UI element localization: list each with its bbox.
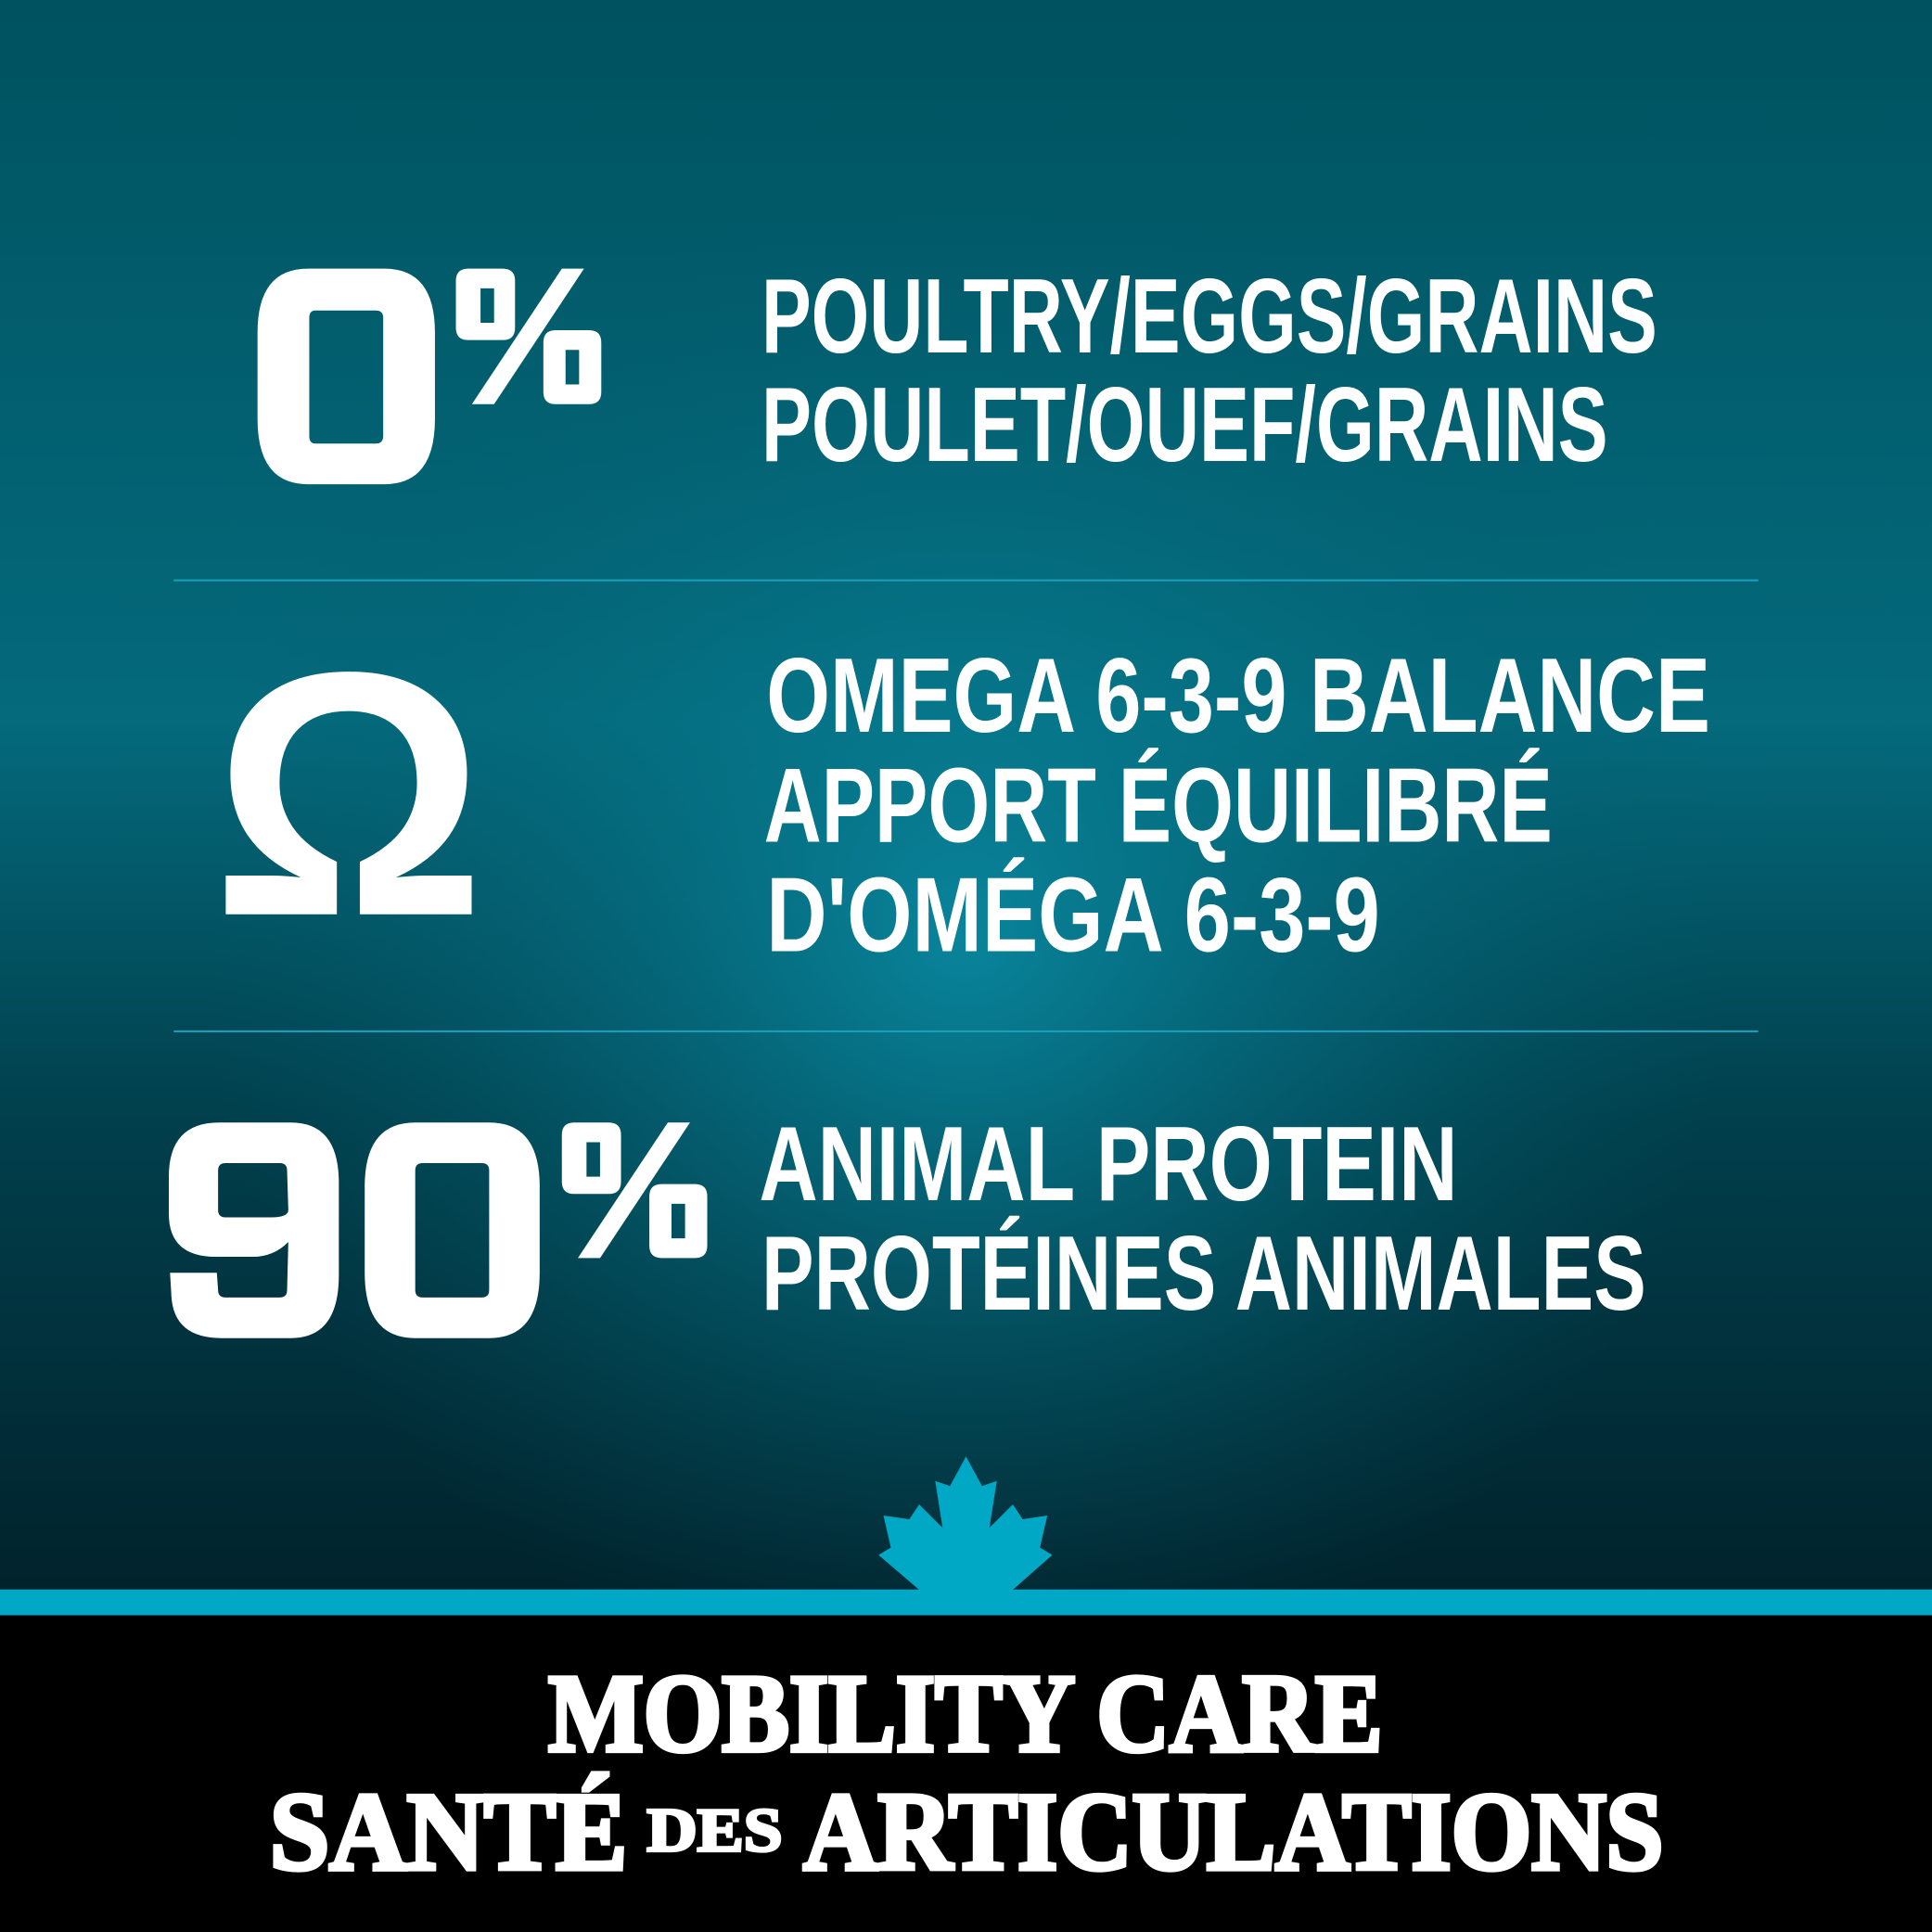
icon: omega: Ω [211, 601, 485, 989]
text: d'omega: D'OMÉGA 6-3-9 [766, 857, 1380, 975]
big number 90% [169, 1122, 708, 1338]
panel: omega balance [211, 601, 1710, 989]
title: santé des articulations: ARTICULATIONS [803, 1770, 1663, 1893]
cyan band [0, 1590, 1932, 1616]
title: santé des articulations: SANTÉ [270, 1770, 627, 1893]
text: proteines: PROTÉINES ANIMALES [761, 1215, 1646, 1333]
footer bar [0, 1616, 1932, 1932]
panel: 0% poultry eggs grains [258, 258, 1657, 484]
text: apport: APPORT ÉQUILIBRÉ [764, 747, 1553, 864]
big number 0% [258, 269, 601, 484]
icon: maple leaf [878, 1456, 1052, 1592]
title: mobility care: MOBILITY CARE [548, 1652, 1383, 1775]
panel: 90% animal protein [169, 1106, 1646, 1338]
title: santé des articulations: DES [646, 1797, 783, 1864]
text: poulet: POULET/OUEF/GRAINS [761, 366, 1608, 484]
text: animal protein: ANIMAL PROTEIN [759, 1106, 1458, 1223]
title: santé des articulations [270, 1770, 1663, 1893]
